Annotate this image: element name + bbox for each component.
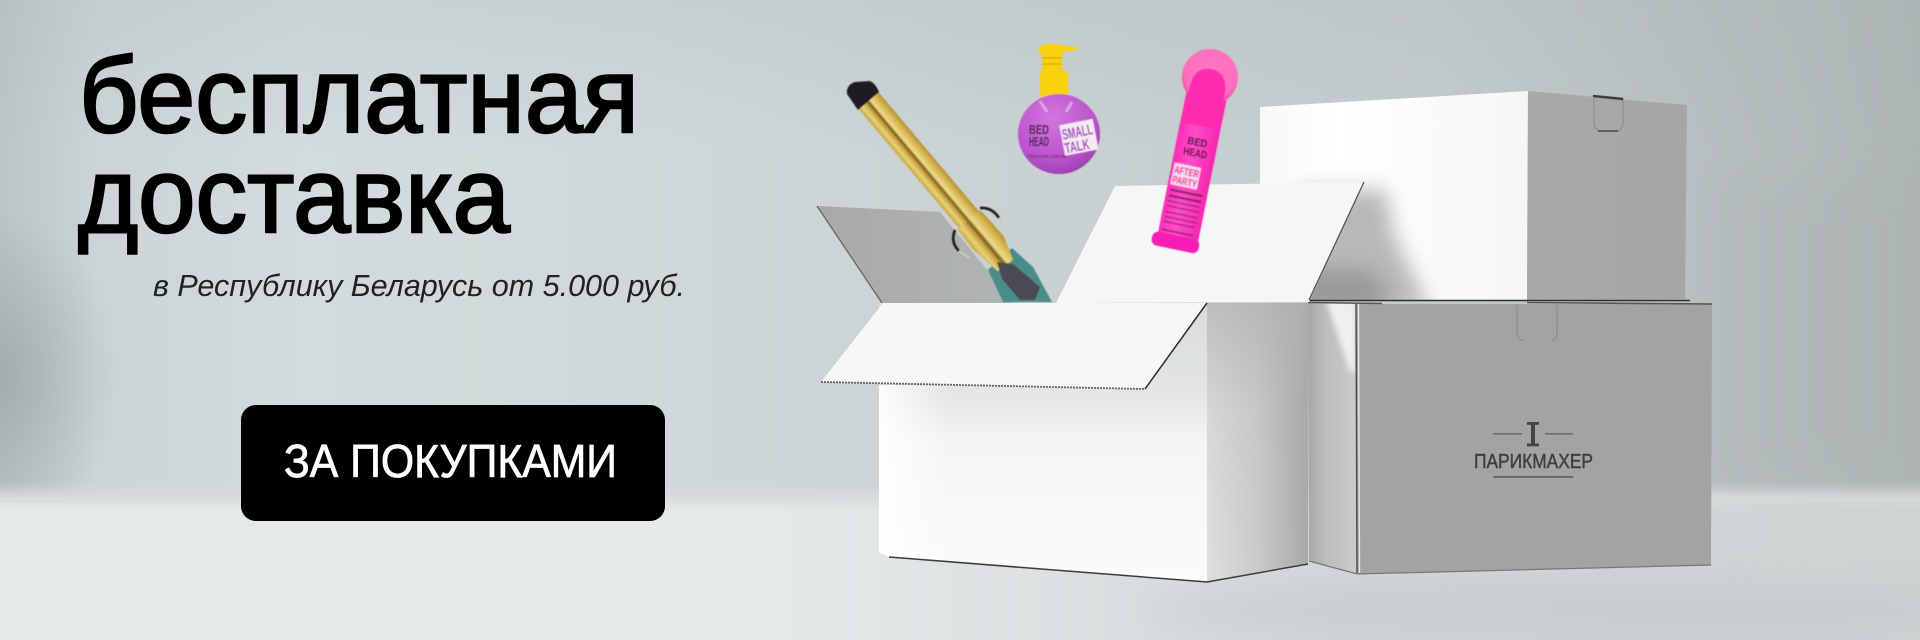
iron handle <box>988 248 1052 302</box>
subtitle: в Республику Беларусь от 5.000 руб. <box>153 268 685 303</box>
ball <box>1018 94 1100 174</box>
tube cap <box>1177 44 1243 110</box>
label: small talk <box>1059 119 1099 158</box>
iron heat pad <box>997 262 1040 300</box>
box front face <box>879 303 1207 582</box>
title <box>78 35 639 255</box>
box right side face <box>1207 303 1308 582</box>
iron clamp wires <box>953 208 1005 258</box>
label: small talk: SMALL <box>1061 121 1094 144</box>
label: bed head: BED <box>1029 122 1049 137</box>
title: доставка <box>78 135 510 255</box>
front flap <box>821 303 1207 389</box>
pink tube: after party <box>1147 44 1243 255</box>
box tab upper <box>1593 96 1623 131</box>
pump bottle: small talk <box>1018 44 1100 174</box>
logo: парикмахер <box>1474 422 1593 478</box>
pump bottle: small talk: HEAD <box>1029 134 1049 149</box>
flap: back right, white <box>1056 182 1364 303</box>
tube label: after party <box>1170 163 1201 191</box>
label: small talk: TALK <box>1063 136 1091 158</box>
button: за покупками: ЗА ПОКУПКАМИ <box>284 435 617 487</box>
tube label: after party: AFTER <box>1173 165 1200 181</box>
open box front <box>821 303 1308 582</box>
iron tip <box>847 81 879 110</box>
flap: back left, inner grey <box>817 206 1014 303</box>
pink tube: after party: HEAD <box>1182 145 1208 162</box>
pump bottle: small talk: TEXTURE CREAM <box>1028 154 1067 159</box>
box base edge <box>889 557 1308 582</box>
title: бесплатная <box>79 35 639 155</box>
tube label: after party: PARTY <box>1171 175 1198 190</box>
upper closed box <box>1260 91 1687 310</box>
button: за покупками <box>241 405 665 521</box>
iron barrel <box>856 90 1019 275</box>
tube body <box>1157 92 1227 242</box>
tube text: bed head: BED <box>1186 135 1208 151</box>
curling iron <box>847 81 1052 302</box>
open box interior flaps <box>817 182 1364 303</box>
box tab lower <box>1517 305 1557 341</box>
cast shadow on upper box <box>1290 190 1430 310</box>
iron nose <box>957 210 1019 275</box>
lower box with logo <box>1308 300 1712 574</box>
tube base <box>1151 231 1200 254</box>
flap shadow highlight left <box>879 385 926 480</box>
pump <box>1038 44 1077 97</box>
logo: парикмахер: ПАРИКМАХЕР <box>1474 451 1593 473</box>
